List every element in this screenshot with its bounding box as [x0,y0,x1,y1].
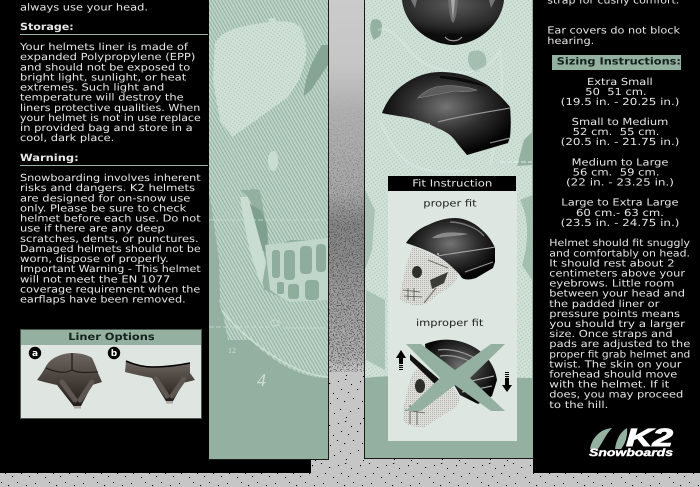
logo: K2 Snowboards: K2 [626,424,673,452]
text: storage body: extremes. Such light and [20,82,164,94]
text: storage body: cool, dark place. [20,133,114,144]
text: size large to extra large [561,198,679,229]
panel: left skull illustration [209,0,329,460]
text: warning body: only. Please be sure to check [20,203,187,214]
text: size extra small: (19.5 in. - 20.25 in.) [561,97,679,108]
icon: badge a [29,347,41,359]
text: fit guidance: It should rest about 2 [549,258,675,269]
text: warning body: Important Warning - This helmet [20,264,201,275]
liner a [37,353,102,408]
text: ear covers note: hearing. [547,36,594,47]
liner b [125,361,195,404]
figure number 12: 12 [228,346,236,355]
liner illustrations [28,346,195,408]
text: fit guidance: pads are adjusted to the [549,339,690,350]
text: warning body: helmet before each use. Do not [20,214,201,224]
helmet side view [382,72,511,155]
text: storage body [19,42,201,144]
text: fit guidance: twist. The skin on your [549,359,682,370]
text: storage body: in provided bag and store in a [20,123,193,134]
text: size medium to large [566,157,674,188]
icon: badge b [108,347,120,359]
icon: badge b: b [111,349,118,359]
icon: X cross mark [406,344,505,411]
text: storage body: Your helmets liner is made of [19,42,189,53]
text: fit guidance: forehead should move [549,370,677,380]
text: fit guidance: and comfortably on head. [549,248,690,259]
text: storage body: bright light, sunlight, or heat [20,72,187,83]
figure number 4: 4 [257,370,266,390]
text: closing line of intro: always use your head. [20,2,148,13]
text: size large to extra large: (23.5 in. - 24.75 in.) [561,218,679,229]
text: ear covers note [547,26,680,47]
text: warning body: coverage requirement when the [20,284,200,295]
rule under warning heading [20,165,208,166]
text: size medium to large: Medium to Large [572,157,668,168]
heading: warning: Warning: [20,153,79,164]
text: size medium to large: 56 cm. 59 cm. [573,167,659,178]
text: fit guidance: does, you may proceed [549,390,683,401]
text: fit guidance: eyebrows. Little room [549,279,674,290]
text: size large to extra large: 60 cm.- 63 cm. [576,208,664,219]
icon: up arrow [396,350,406,370]
text: size large to extra large: Large to Extra Large [561,198,679,209]
text: size small to medium: (20.5 in. - 21.75 in.) [561,137,679,148]
icon: badge a: a [32,349,38,359]
text: storage body: expanded Polypropylene (EPP) [20,52,195,63]
illustration: improper fit helmet on skull [396,340,512,427]
text: size small to medium: Small to Medium [572,117,668,128]
logo: K2 Snowboards: Snowboards [589,447,673,459]
heading: fit instruction: Fit Instruction [412,178,492,190]
logo: K2 Snowboards [588,424,674,459]
text: size small to medium: 52 cm. 55 cm. [573,127,659,138]
panel: fit instruction [388,191,517,441]
text: warning body [20,173,201,306]
illustration: proper fit helmet on skull [400,218,495,305]
icon: down arrow [502,372,512,392]
text: warning body: scratches, dents, or punctures. [20,234,199,245]
text: warning body: will not meet the EN 1077 [20,274,170,285]
text: storage body: liners protective qualities. When [20,103,200,114]
text: ear covers note: Ear covers do not block [547,26,680,37]
helmet front view [402,0,504,45]
sizing heading bar [552,55,681,70]
text: fit guidance: size. Once straps and [549,329,673,340]
label: improper fit: improper fit [416,318,484,329]
text: warning body: Damaged helmets should not be [20,244,201,255]
text: size medium to large: (22 in. - 23.25 in.) [566,177,674,188]
heading: liner options: Liner Options [68,332,155,343]
text: warning body: earflaps have been removed. [20,295,186,306]
text: warning body: use if there are any deep [20,224,165,235]
fit instruction heading bar [388,176,516,191]
heading: sizing instructions: Sizing Instructions: [557,56,681,67]
panel: left black column [0,0,311,473]
text: warning body: Snowboarding involves inherent [20,173,201,184]
text: warning body: worn, dispose of properly. [20,254,169,265]
text: fit guidance: to the hill. [549,400,608,411]
text: size extra small: 50 51 cm. [585,87,647,98]
heading: storage: Storage: [20,22,74,33]
text: storage body: and should not be exposed to [20,62,190,73]
text: fit guidance: with the helmet. If it [549,380,670,391]
label: proper fit: proper fit [423,199,477,210]
text: warning body: risks and dangers. K2 helmets [20,183,195,194]
text: fit guidance: pressure points means [549,309,680,320]
text: fit guidance: Helmet should fit snuggly [549,238,690,249]
text: fit guidance: between your head and [549,289,685,300]
panel: liner options [21,330,201,418]
text: fit guidance: centimeters above your [549,268,685,280]
text: fit guidance: proper fit grab helmet and [549,349,690,360]
liner options heading bar [21,330,201,345]
panel: right skull illustration [364,0,533,459]
text: fit guidance [549,238,690,411]
text: warning body: are designed for on-snow use [20,193,190,204]
text: storage body: your helmet is not in use replace [20,113,201,124]
text: storage body: temperature will destroy the [20,93,184,104]
text: fit guidance: you should try a larger [549,319,685,330]
text: size small to medium [561,117,679,148]
text: fit guidance: the padded liner or [549,299,659,310]
text: size extra small: Extra Small [587,77,653,88]
panel: right black column [533,0,700,473]
rule under storage heading [20,34,208,35]
text: size extra small [561,77,679,108]
